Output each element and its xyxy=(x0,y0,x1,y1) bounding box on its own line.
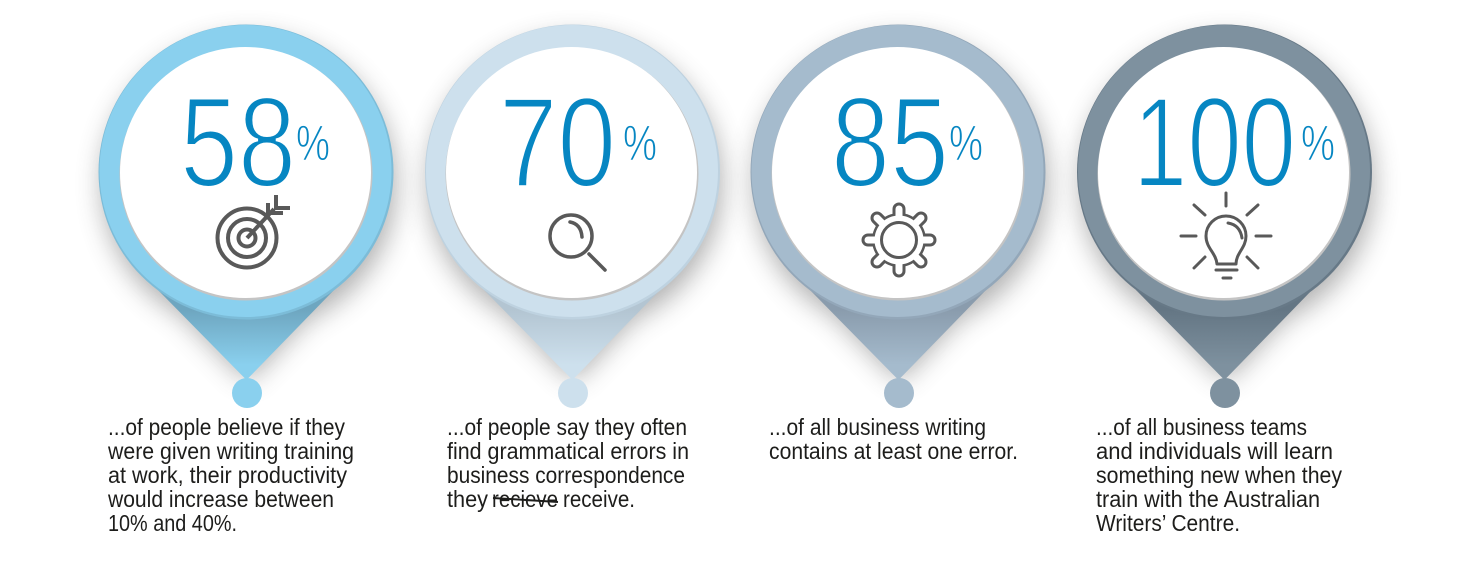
pin ring xyxy=(750,24,1046,320)
caption: would increase between xyxy=(107,486,334,512)
pin ring xyxy=(1077,24,1372,320)
pin ring xyxy=(425,24,720,320)
pin shadow xyxy=(754,37,1048,382)
caption: ...of all business writing xyxy=(769,414,986,440)
caption lines: recieve xyxy=(492,486,558,512)
pin tail xyxy=(158,290,334,380)
strikethrough xyxy=(493,498,558,502)
caption lines: they xyxy=(447,486,488,512)
pin dot xyxy=(884,378,914,408)
panel: 85% pin xyxy=(750,24,1048,464)
caption: Writers’ Centre. xyxy=(1096,510,1240,536)
caption xyxy=(447,414,689,512)
caption: were given writing training xyxy=(107,438,354,464)
caption lines: receive. xyxy=(563,486,635,512)
icon: magnifying glass xyxy=(550,215,605,270)
pin dot xyxy=(232,378,262,408)
caption: contains at least one error. xyxy=(769,438,1018,464)
pin tail xyxy=(810,290,986,380)
caption: and individuals will learn xyxy=(1096,438,1333,464)
pin dot xyxy=(558,378,588,408)
caption: at work, their productivity xyxy=(108,462,347,488)
icon: target xyxy=(218,195,290,268)
pin dot xyxy=(1210,378,1240,408)
icon: light bulb xyxy=(1181,193,1271,278)
caption: train with the Australian xyxy=(1096,486,1320,512)
panel: 58% pin xyxy=(98,24,396,536)
pin shadow xyxy=(102,37,396,382)
pin shadow xyxy=(428,37,722,382)
pin face xyxy=(1098,47,1350,300)
caption: 10% and 40%. xyxy=(108,510,237,536)
icon: gear xyxy=(868,209,930,271)
statistic 85: 85 xyxy=(831,72,949,214)
panel: 70% pin xyxy=(425,24,722,512)
percent sign: % xyxy=(949,115,983,171)
pin tail xyxy=(484,290,660,380)
percent sign: % xyxy=(296,115,330,171)
statistic 70: 70 xyxy=(499,72,616,214)
pin ring xyxy=(98,24,394,320)
caption: ...of people believe if they xyxy=(108,414,345,440)
caption: something new when they xyxy=(1096,462,1342,488)
percent sign: % xyxy=(623,115,657,171)
statistic 100: 100 xyxy=(1133,72,1296,214)
caption lines: find grammatical errors in xyxy=(447,438,689,464)
pin face xyxy=(120,47,372,300)
panel: 100% pin xyxy=(1077,24,1374,536)
pin face xyxy=(772,47,1024,300)
percent sign: % xyxy=(1301,115,1335,171)
caption lines: ...of people say they often xyxy=(447,414,687,440)
statistic 58: 58 xyxy=(180,72,296,214)
caption lines: business correspondence xyxy=(447,462,685,488)
pin face xyxy=(446,47,698,300)
pin shadow xyxy=(1080,37,1374,382)
pin tail xyxy=(1136,290,1312,380)
caption: ...of all business teams xyxy=(1096,414,1307,440)
